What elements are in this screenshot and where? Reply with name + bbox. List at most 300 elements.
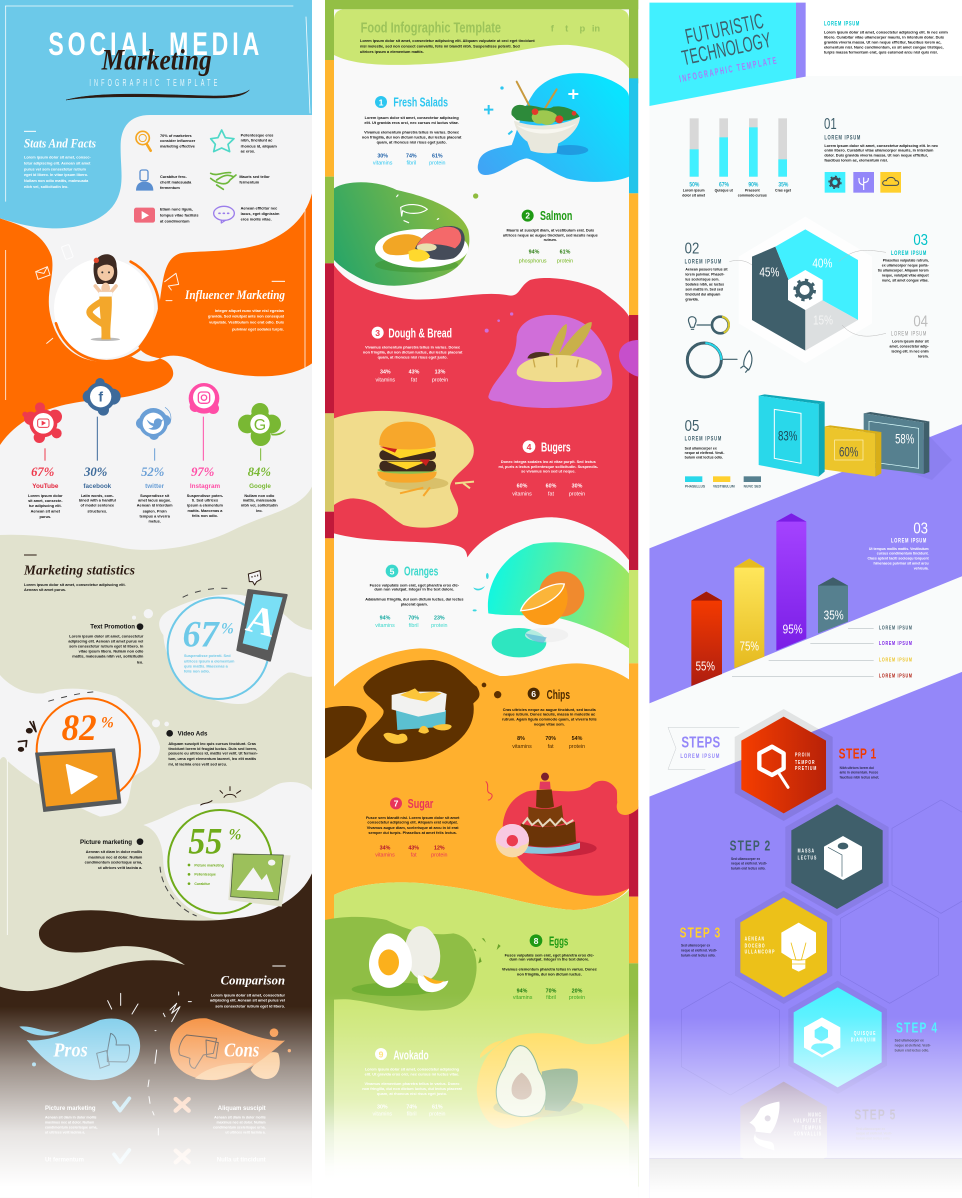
icon: chat bubble: [248, 571, 261, 585]
text block: 02: lorem pulvinar. Phasell-: [685, 272, 725, 276]
shape: orange influencer area: [0, 193, 312, 445]
chart: 3d bars: 83%: [778, 428, 797, 444]
shape: eggs green blob: [325, 917, 477, 1011]
fact: curabitur: Curabitur fero-: [160, 175, 188, 179]
fact: pellentesque: [241, 134, 277, 154]
chart: 67 percent circle: ultrices ipsum a elementum: [184, 659, 235, 663]
chart: progress bars: Praesent: [745, 189, 761, 193]
step 5: VULPUTATE: [793, 1118, 822, 1124]
section: avocado: Vivamus elementum pharetra tellus in varius. Donec: [364, 1082, 460, 1086]
text block: purple 03: Class aptent taciti sociosqu torquent: [867, 556, 929, 560]
section: eggs: dum non volutpat. Integer in the text dolore.: [509, 958, 589, 962]
icon tile: gear: [825, 172, 845, 193]
stat: youtube: Lorem ipsum dolor: [28, 494, 63, 498]
step 3: neque at eleifend. Vesti-: [681, 948, 717, 952]
step 1: TEMPOR: [795, 759, 816, 765]
chart: 55 percent circle: %: [229, 826, 241, 843]
step 1: STEP 1: [839, 746, 876, 762]
section: fresh salads: vitamins: [373, 161, 393, 167]
shape: burger blob: [334, 411, 474, 528]
section: avocado: vitamins: [373, 1112, 392, 1118]
section: oranges: protein: [431, 623, 448, 629]
icon tile: cloud: [880, 172, 901, 193]
icon: speech bubble: [214, 206, 234, 223]
chart: progress bars: 35%: [778, 182, 789, 189]
section: fresh salads: elit. Ut gravida eros orci, nec cursus mi luctus vitae.: [364, 121, 459, 125]
section: fresh salads: Vivamus elementum pharetra tellus in varius. Donec: [364, 131, 460, 135]
shape: purple side blob: [619, 340, 638, 377]
section: avocado: elit. Ut gravida eros orci, nec cursus mi luctus vitae.: [365, 1073, 459, 1077]
stat: twitter: Suspendisse sit: [140, 494, 170, 498]
shape: brown footer: [0, 873, 312, 1198]
graphic: cake and donut: [486, 773, 597, 857]
step 3: ULLAMCORP: [745, 949, 775, 955]
stat: instagram: 97%: [191, 465, 214, 479]
section: 01: enim libero. Curabitur vitae ullamcorper mauris, in interdum: [824, 149, 934, 153]
section: avocado: Avokado: [393, 1048, 429, 1062]
text block: purple 03: vehicula.: [914, 567, 929, 571]
title: Marketing: [101, 44, 212, 76]
chart: 67 percent circle: felis non odio.: [184, 669, 210, 673]
chart: arrow bars: 55%: [696, 660, 715, 674]
section: 01: [824, 116, 939, 193]
text block: 04: amet, consectetur adip-: [890, 345, 929, 349]
stat: youtube: Aenean sit amet: [31, 510, 61, 514]
step 4: [788, 981, 937, 1094]
section: influencer marketing: Integer aliquet nunc vitae nisl egestas: [215, 309, 284, 313]
section: avocado: protein: [429, 1112, 446, 1118]
text block: video ads: posuere eu ultrices id, mattis vel velit. Ut fermen-: [168, 752, 258, 756]
section: influencer marketing: Influencer Marketing: [184, 288, 285, 302]
section: marketing statistics heading: [23, 555, 135, 592]
section: dough and bread: 34%: [380, 369, 391, 375]
fact: curabitur: [160, 176, 192, 189]
text block: 02: Aenean posuere tellus sit: [685, 267, 728, 271]
text block: 04: iscing elit. In nec enim: [891, 349, 929, 353]
panel: futuristic technology column: [649, 0, 962, 1198]
intro text: gravida viverra massa. Ut non neque efficitur, faucibus lorem ac,: [824, 40, 941, 44]
chart: hexagon percentages: [739, 217, 872, 363]
section: dough and bread: 13%: [435, 369, 446, 375]
step 5: [740, 1082, 895, 1182]
stat: instagram: mattis. Maecenas a: [188, 509, 223, 513]
comparison rows: ut ultrices velit lacinia a.: [45, 1130, 85, 1134]
section: dough and bread: vitamins: [376, 377, 395, 383]
section: salmon: 94%: [529, 249, 540, 255]
text block: purple 03: Ut tempus mollis mattis. Vestibulum: [869, 547, 929, 551]
stat: facebook: Latin words, com-: [81, 494, 114, 498]
text block: 04: Lorem ipsum dolor sit: [892, 340, 929, 344]
text block: 02: [685, 240, 728, 302]
chart: arrow bars: 75%: [740, 640, 759, 654]
fact: pellentesque: nibh, tincidunt ac: [241, 139, 273, 143]
text block: text promotion: sem consectetur rutrum eget id libero. In: [69, 645, 144, 649]
shape: salad blob: [478, 73, 629, 182]
chart: 82 percent circle: %: [101, 714, 114, 731]
section: avocado: non fringilla, dui non dictum luctus, dui lectus placerat: [362, 1087, 462, 1091]
section: sugar: [366, 797, 460, 859]
step 2: bulum erat lectus odio.: [731, 867, 766, 871]
intro text: libero. Curabitur vitae ullamcorper mauris, in interdum dolor. Duis: [824, 35, 944, 39]
comparison rows: ut ultrices velit lacinia a.: [225, 1130, 266, 1134]
chart: progress bars: dolor sit amet: [682, 194, 706, 198]
section: dough and bread: Vivamus elementum pharetra tellus in varius. Donec: [365, 346, 461, 350]
section: dough and bread: 3: [375, 328, 380, 338]
title: INFOGRAPHIC TEMPLATE: [89, 77, 218, 88]
chart: arrow bars: [691, 513, 848, 686]
chart: 55 percent circle: Pellentesque: [194, 873, 216, 877]
section: oranges: placerat quam.: [401, 603, 428, 607]
section: comparison heading: sem consectetur rutrum eget id libero.: [215, 1005, 285, 1009]
section: sugar: 7: [394, 799, 399, 809]
step 1: Nibh ultrices lorem dui: [840, 766, 874, 770]
icon: music notes: [18, 722, 36, 751]
section: oranges: 23%: [434, 615, 445, 621]
stat: google: 84%: [248, 465, 271, 479]
legend lines: LOREM IPSUM: [879, 673, 912, 680]
text block: video ads: tincidunt lorem id feugiat luctus. Duis sed lorem,: [168, 747, 257, 751]
text block: 04: LOREM IPSUM: [891, 331, 926, 338]
section: 01: Lorem ipsum dolor sit amet, consectetur adipiscing elit. In nec: [824, 144, 939, 148]
stat: youtube: sit amet, consecte-: [28, 499, 63, 503]
section: stats and facts: purus vel sem consectetur rutrum: [24, 167, 87, 171]
section: header text: ultrices ipsum a elementum mattis.: [360, 50, 424, 54]
text block: 04: [890, 314, 929, 359]
section: 05 and legend: Sed ullamcorper ex: [685, 446, 717, 450]
shape: light green lower area: [334, 882, 629, 1198]
section: dough and bread: fat: [411, 377, 417, 383]
shape: avocado yellow blob: [477, 1033, 629, 1130]
section: burgers: fat: [548, 491, 554, 497]
shape: chips orange area: [334, 648, 629, 910]
comparison rows: Aenean sit diam in dolor mollis: [214, 1115, 266, 1119]
section: fresh salads: fibril: [406, 161, 416, 167]
step 1: PRETIUM: [795, 765, 817, 771]
chart: progress bars: Quisque ut: [715, 189, 734, 193]
graphic: cons: [170, 1018, 291, 1080]
section: chips: neque vitae sem.: [534, 723, 565, 727]
stat: facebook: of model sentence: [81, 503, 114, 507]
chart: 55 percent circle: 55: [188, 821, 222, 862]
stat: facebook: f: [98, 389, 103, 405]
connector lines: [729, 250, 886, 336]
step 2: neque at eleifend. Vesti-: [731, 862, 767, 866]
stat: twitter: 52%: [141, 465, 164, 479]
icon: person: [136, 170, 153, 191]
section: marketing statistics heading: Marketing statistics: [23, 562, 135, 577]
text block: 03: Phasellus vulputate rutrum,: [883, 259, 929, 263]
step 2: LECTUS: [798, 855, 817, 860]
graphic: pros: [19, 1018, 140, 1080]
icon: handshake: [211, 173, 236, 189]
icons: influencer doodles: [36, 244, 179, 343]
graphic: chips bag: [383, 683, 501, 744]
step 5: Sed ullamcorper ex: [856, 1127, 885, 1131]
step 5: STEP 5: [854, 1107, 895, 1123]
text block: picture marketing: condimentum scelerisque urna,: [85, 860, 142, 864]
shape: white blob behind text promotion: [159, 594, 312, 704]
icons: social links: f: [551, 23, 555, 33]
section: burgers: se vivamus non sed ut neque.: [521, 470, 576, 474]
graphic: pros: Pros: [52, 1040, 88, 1062]
text block: picture marketing: Aenean sit diam in dolor mollis: [86, 850, 142, 854]
section: 05 and legend: PHASELLUS: [685, 485, 706, 489]
section: chips: neque rutrum. Donec iaculis, massa in molestie ac: [503, 713, 596, 717]
section: salmon: protein: [557, 259, 573, 265]
section: 01: LOREM IPSUM: [824, 135, 861, 142]
chart: hexagon percentages: 45%: [759, 266, 779, 280]
section: sugar: 12%: [434, 845, 445, 851]
chart: 82 percent circle: [18, 692, 140, 812]
text block: text promotion: mattis, malesuada nibh vel, sollicitudin: [72, 655, 144, 659]
comparison rows: condimentum scelerisque urna,: [213, 1125, 266, 1129]
step 3: bulum erat lectus odio.: [681, 953, 716, 957]
section: 05 and legend: neque at eleifend. Vesti-: [685, 451, 725, 455]
title banner: [649, 3, 806, 106]
section: avocado: [362, 1048, 462, 1118]
text block: video ads: [166, 730, 258, 767]
step 3: DOCEBO: [745, 943, 766, 949]
text block: 02: gravida.: [685, 298, 699, 302]
text block: purple 03: himenaeos pulvinar sit amet arcu: [873, 562, 929, 566]
comparison rows: [45, 1098, 266, 1164]
stat: instagram: [187, 383, 224, 518]
shape: chips dark blob: [357, 660, 480, 762]
intro text: LOREM IPSUM: [824, 21, 860, 28]
section: sugar: vitamins: [375, 853, 395, 859]
section: oranges: 94%: [380, 615, 391, 621]
shape: oranges ellipse: [492, 628, 546, 657]
step 4: bulum erat lectus odio.: [895, 1048, 929, 1052]
step 5: NUNC: [808, 1112, 822, 1118]
fact: etiam: Etiam nunc ligula,: [160, 208, 193, 212]
shape: chips left dark blob: [325, 706, 367, 758]
chart: progress bars: commodo cursus: [738, 194, 767, 198]
section: chips: 8%: [517, 736, 525, 742]
chart: 67 percent circle: quis mattis. Maecenas a: [184, 664, 229, 668]
stat: facebook: facebook: [83, 483, 112, 490]
section: chips: protein: [569, 744, 585, 750]
section: chips: 54%: [572, 736, 583, 742]
icon: magnifier: [136, 131, 151, 151]
section: header text: Lorem ipsum dolor sit amet, consectetur adipiscing elit. Aliquam vulputate ut orci eget tincidunt: [360, 39, 535, 43]
section: influencer marketing: vulputate. Vestibulum nec erat odio. Duis: [209, 321, 284, 325]
section: chips: 70%: [545, 736, 556, 742]
chart: 3d bars: 60%: [839, 444, 858, 460]
intro text: [824, 21, 948, 54]
stat: instagram: ti. Sed ultrices: [192, 499, 218, 503]
fact: aenean: [240, 207, 280, 220]
section: chips: fat: [548, 744, 554, 750]
section: avocado: Lorem ipsum dolor sit amet, consectetur adipiscing: [365, 1068, 460, 1072]
fact: pellentesque: ac eros.: [241, 150, 255, 154]
stat: facebook: 30%: [83, 465, 107, 479]
text block: picture marketing: [80, 838, 143, 870]
step 2: [730, 797, 889, 916]
text block: text promotion: Text Promotion: [90, 624, 135, 631]
step 1: [735, 709, 879, 821]
comparison rows: Aliquam suscipit: [218, 1106, 266, 1112]
shape: red area: [334, 265, 629, 560]
chart: progress bars: 50%: [689, 182, 700, 189]
step 4: QUISQUE: [854, 1030, 876, 1036]
stat: twitter: Aenean id interdum: [137, 504, 173, 508]
section: eggs: 20%: [572, 988, 583, 994]
steps banner: LOREM IPSUM: [680, 753, 720, 760]
chart: progress bars: Lorem ipsum: [683, 189, 705, 193]
section: stats and facts: nibh vel, sollicitudin leo.: [24, 185, 68, 189]
section: 05 and legend: bulum erat lectus odio.: [685, 456, 723, 460]
legend lines: [732, 625, 912, 680]
section: marketing statistics heading: Aenean sit amet purus.: [24, 588, 66, 592]
section: marketing statistics heading: Lorem ipsum dolor sit amet, consectetur adipiscing elit.: [24, 583, 126, 587]
stat: youtube: YouTube: [32, 483, 59, 490]
section: header text: Food Infographic Template: [361, 20, 501, 36]
section: dough and bread: Dough & Bread: [388, 326, 452, 340]
shape: purple diagonal band one: [649, 424, 962, 703]
section: avocado: 61%: [432, 1104, 443, 1110]
step 5: CONVALLIS: [794, 1131, 822, 1136]
text block: video ads: tum, urna eget elementum laoreet, leo elit mattis: [168, 757, 256, 761]
section: influencer marketing: gravida. Sed volutpat ante non consequat: [208, 315, 285, 319]
section: oranges: Fusce vulputate sem erat, eget pharetra eros dic-: [370, 584, 460, 588]
chart: progress bars: 90%: [748, 182, 759, 189]
section: salmon: 2: [525, 211, 530, 221]
fact: marketers: consider influencer: [160, 139, 196, 143]
section: salmon: Salmon: [540, 209, 572, 223]
stat: facebook: structures.: [87, 509, 107, 513]
stat: google: G: [254, 417, 266, 434]
stat: facebook: bined with a handful: [79, 499, 116, 503]
section: stats and facts: Nullam non odio mattis, malesuada: [24, 179, 89, 183]
section: sugar: semper dui turpis. Phasellus at amet felis lectus.: [368, 831, 457, 835]
icons: social links: t: [565, 23, 568, 33]
decorative hex outlines: [681, 800, 962, 1095]
text block: video ads: Video Ads: [178, 731, 208, 738]
shape: purple blob: [488, 315, 612, 408]
fact: curabitur: cherit malesuada: [160, 180, 192, 184]
shape: white bubbles: [132, 609, 169, 727]
shape: sugar yellow splash: [617, 800, 638, 815]
text block: 04: lorem.: [918, 355, 929, 359]
chart: 3d bars: 58%: [895, 431, 914, 447]
section: stats and facts: tetur adipiscing elit. Aenean sit amet: [24, 161, 91, 165]
step 2: MASSA: [798, 848, 815, 854]
section: comparison heading: Comparison: [221, 973, 285, 987]
shape: white blob behind video ads: [0, 675, 160, 817]
chart: progress bars: Cras eget: [775, 189, 792, 193]
step 3: STEP 3: [680, 925, 720, 941]
stat: twitter: metus.: [148, 519, 161, 523]
text block: purple 03: 03: [913, 520, 928, 537]
stat: twitter: amet lacus augue.: [138, 499, 171, 503]
chart: progress bars: [682, 118, 792, 198]
chart: arrow bars: 35%: [824, 608, 844, 622]
chart: progress bars: 67%: [719, 182, 729, 189]
section: fresh salads: 61%: [432, 153, 443, 159]
strip: left edge colours: [325, 0, 334, 1187]
step 5: TEMPUS: [802, 1125, 822, 1130]
section: burgers: vitamins: [512, 491, 532, 497]
section: 05 and legend: [685, 418, 762, 489]
chart: 3d bars: [759, 394, 952, 480]
section: 05 and legend: NUNC SED: [744, 485, 762, 489]
panel: food infographic column: [325, 0, 638, 1198]
section: 01: faucibus lorem ac, elementum nisi.: [824, 159, 888, 163]
strip: right edge colours: [629, 0, 638, 1187]
text block: 02: tincidunt dui aliquam: [685, 292, 720, 296]
section: burgers: 30%: [572, 484, 583, 490]
graphic: bread: [485, 312, 602, 382]
section: burgers: mi, puris a lectus pellentesque sollicitudin. Suspendis-: [498, 465, 599, 469]
step 4: DIAMQUIM: [851, 1037, 876, 1043]
stat: instagram: felis non odio.: [192, 514, 218, 518]
chart: 55 percent circle: Curabitur: [194, 882, 211, 886]
step 4: neque at eleifend. Vesti-: [895, 1043, 931, 1047]
section: sugar: Fusce sem blandit nisi. Lorem ipsum dolor sit amet: [366, 816, 460, 820]
stat: facebook: [79, 378, 121, 513]
panel: social media marketing column: [0, 0, 312, 1198]
shape: header: [334, 9, 629, 68]
text block: 03: 03: [913, 232, 928, 249]
graphic: avocado: [480, 1040, 583, 1117]
steps banner: [668, 727, 739, 769]
text block: text promotion: vitae ipsum libero. Nullam non odio: [79, 650, 144, 654]
text block: 02: 02: [685, 240, 699, 257]
section: fresh salads: non fringilla, dui non dictum luctus, dui lectus placerat: [362, 136, 462, 140]
title: SOCIAL MEDIA: [48, 26, 259, 62]
section: chips: Cras ultricies neque ac augue tincidunt, sed iaculis: [503, 708, 596, 712]
section: oranges: 70%: [408, 615, 419, 621]
section: salmon: phosphorus: [519, 259, 547, 265]
icon: photo frame: [228, 853, 291, 907]
section: oranges: Adalarimus fringilla, dui sem dictum luctus, dui lectus: [365, 598, 463, 602]
text block: purple 03: cursus condimentum tincidunt.: [877, 552, 929, 556]
section: stats and facts: [24, 131, 96, 189]
stat: instagram: Suspendisse poten-: [187, 494, 224, 498]
section: eggs: protein: [569, 995, 585, 1001]
text block: video ads: Aliquam suscipit leo quis cursus tincidunt. Cras: [168, 742, 256, 746]
section: salmon: rutrum.: [544, 238, 557, 242]
chart: 67 percent circle: [168, 571, 287, 699]
intro text: Lorem ipsum dolor sit amet, consectetur adipiscing elit. In nec enim: [824, 31, 948, 35]
title banner: TECHNOLOGY: [680, 27, 773, 70]
text block: 03: tis ullamcorper. Aliquam lorem: [878, 268, 929, 272]
text block: text promotion: [68, 623, 144, 664]
chart: arrow bars: 95%: [783, 622, 803, 636]
section: sugar: 43%: [408, 845, 419, 851]
section: dough and bread: non fringilla, dui non dictum luctus, dui lectus placerat: [363, 350, 463, 354]
section: oranges: 5: [390, 566, 395, 576]
stat: youtube: tur adipiscing elit.: [29, 504, 62, 508]
section: eggs: 94%: [517, 988, 528, 994]
step 5: neque at eleifend. Vesti-: [856, 1132, 892, 1136]
section: burgers: Donec integra sodales leo at vitae purpit. Sed lectus: [501, 460, 596, 464]
title banner: FUTURISTIC: [683, 8, 766, 49]
legend lines: LOREM IPSUM: [879, 657, 912, 664]
doodles: comparison: [108, 992, 191, 1135]
text block: text promotion: Lorem ipsum dolor sit amet, consectetur: [69, 635, 144, 639]
fact: etiam: at condimentum: [160, 219, 190, 223]
section: sugar: Vivamus augue diam, scelerisque at arcu in id erat: [367, 826, 459, 830]
section: oranges: vitamins: [375, 623, 395, 629]
intro text: elementum nisi. Nunc condimentum, ex sit amet congue tristique,: [824, 45, 944, 49]
text block: text promotion: adipiscing elit. Aenean sit amet purus vel: [68, 640, 143, 644]
fact: etiam: [160, 208, 199, 223]
fact: marketers: 70% of marketers: [160, 134, 192, 138]
step 1: ante in elementum. Fusce: [840, 771, 878, 775]
section: chips: vitamins: [512, 744, 532, 750]
